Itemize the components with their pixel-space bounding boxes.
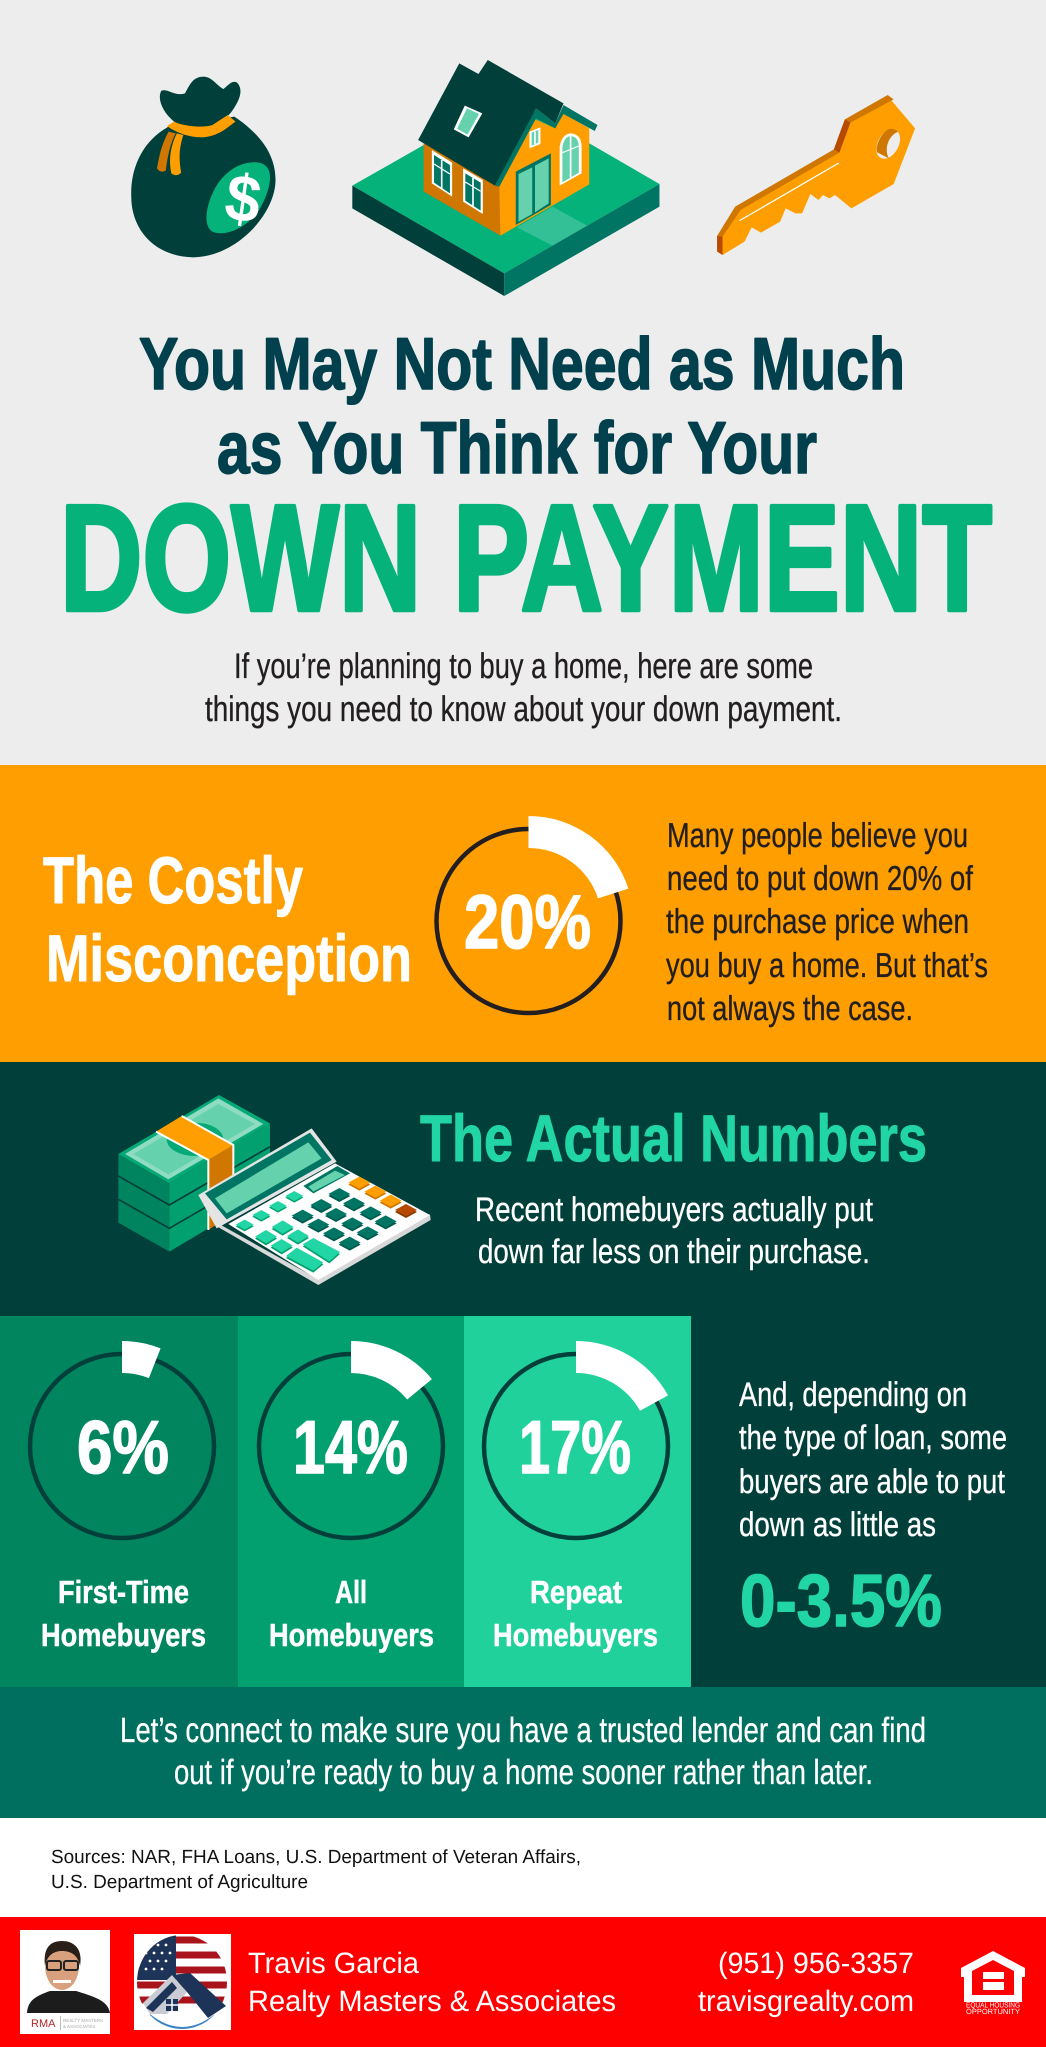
- agent photo: RMA: [31, 2018, 56, 2030]
- text block: loan types: down as little as: [739, 1506, 936, 1544]
- text block: loan types: And, depending on: [739, 1376, 967, 1414]
- callout: 0-3.5 percent: 0-3.5%: [740, 1559, 942, 1642]
- text block: misconception explanation: not always the case.: [667, 990, 913, 1028]
- contact details: travisgrealty.com: [698, 1985, 914, 2018]
- panel: header background: [0, 0, 1046, 765]
- label: first-time homebuyers: [41, 1574, 206, 1653]
- agent name and company: [248, 1947, 616, 2018]
- donut chart: 6 percent: 6%: [77, 1405, 169, 1489]
- heading: the actual numbers: The Actual Numbers: [420, 1101, 927, 1175]
- donut chart: 6 percent: [30, 1341, 214, 1538]
- text block: sources: Sources: NAR, FHA Loans, U.S. Department of Veteran Affairs,: [51, 1847, 581, 1868]
- text block: loan types: [739, 1376, 1007, 1544]
- text block: recent homebuyers: down far less on their purchase.: [478, 1233, 870, 1271]
- donut chart: 14 percent: [259, 1341, 443, 1538]
- label: first-time homebuyers: First-Time: [58, 1574, 189, 1610]
- donut chart: 20 percent: 20%: [464, 880, 591, 965]
- text block: recent homebuyers: Recent homebuyers actually put: [475, 1191, 873, 1229]
- panel: sources: [0, 1818, 1046, 1917]
- contact details: [698, 1947, 914, 2018]
- text block: recent homebuyers: [475, 1191, 873, 1271]
- text block: call to action: out if you’re ready to buy a home sooner rather than later.: [174, 1753, 873, 1792]
- agent photo: & ASSOCIATES: [63, 2024, 95, 2029]
- panel: call to action: [0, 1687, 1046, 1818]
- label: all homebuyers: Homebuyers: [269, 1617, 434, 1653]
- agent photo: REALTY MASTERS: [63, 2018, 103, 2023]
- company logo: [134, 1934, 231, 2032]
- heading: the costly misconception: Misconception: [46, 921, 412, 995]
- icon: stack of cash: [118, 1095, 270, 1252]
- stat card: first-time homebuyers: [0, 1316, 238, 1687]
- icon: equal housing opportunity: OPPORTUNITY: [966, 2007, 1020, 2016]
- heading: the costly misconception: [43, 843, 412, 995]
- text block: misconception explanation: need to put down 20% of: [667, 860, 973, 898]
- icon: key: [717, 95, 915, 255]
- intro text: [205, 646, 842, 729]
- title: as You Think for Your: [217, 406, 817, 489]
- icon: calculator: [198, 1128, 431, 1285]
- panel: the costly misconception: [0, 765, 1046, 1062]
- text block: misconception explanation: the purchase price when: [666, 903, 969, 941]
- text block: misconception explanation: [666, 817, 988, 1028]
- label: first-time homebuyers: Homebuyers: [41, 1617, 206, 1653]
- icon: money bag: [131, 77, 276, 257]
- donut chart: 14 percent: 14%: [293, 1405, 408, 1489]
- icon: equal housing opportunity: [961, 1951, 1025, 2016]
- agent photo: [20, 1930, 110, 2034]
- calculator keys: [236, 1177, 417, 1273]
- donut chart: 17 percent: [484, 1341, 668, 1538]
- label: all homebuyers: All: [335, 1574, 367, 1610]
- title: [139, 322, 905, 489]
- text block: misconception explanation: Many people believe you: [667, 817, 968, 855]
- text block: sources: [51, 1847, 581, 1893]
- agent name and company: Realty Masters & Associates: [248, 1985, 616, 2018]
- icon: equal housing opportunity: EQUAL HOUSING: [966, 2000, 1020, 2010]
- panel: the actual numbers: [0, 1062, 1046, 1687]
- stat card: all homebuyers: [238, 1316, 464, 1687]
- icon: house on green lot: [352, 60, 659, 296]
- heading: the costly misconception: The Costly: [43, 843, 303, 917]
- text block: call to action: [120, 1711, 926, 1792]
- text block: sources: U.S. Department of Agriculture: [51, 1872, 308, 1893]
- contact details: (951) 956-3357: [718, 1947, 914, 1980]
- donut chart: 20 percent: [436, 816, 628, 1013]
- label: repeat homebuyers: Homebuyers: [493, 1617, 658, 1653]
- panel: agent footer: [0, 1917, 1046, 2047]
- label: all homebuyers: [269, 1574, 434, 1653]
- intro text: things you need to know about your down payment.: [205, 689, 842, 729]
- label: repeat homebuyers: Repeat: [530, 1574, 622, 1610]
- label: repeat homebuyers: [493, 1574, 658, 1653]
- stat card: repeat homebuyers: [464, 1316, 691, 1687]
- icon: dollar sign on bag: $: [221, 159, 266, 237]
- donut chart: 17 percent: 17%: [519, 1405, 631, 1489]
- intro text: If you’re planning to buy a home, here are some: [234, 646, 813, 686]
- agent name and company: Travis Garcia: [248, 1947, 420, 1980]
